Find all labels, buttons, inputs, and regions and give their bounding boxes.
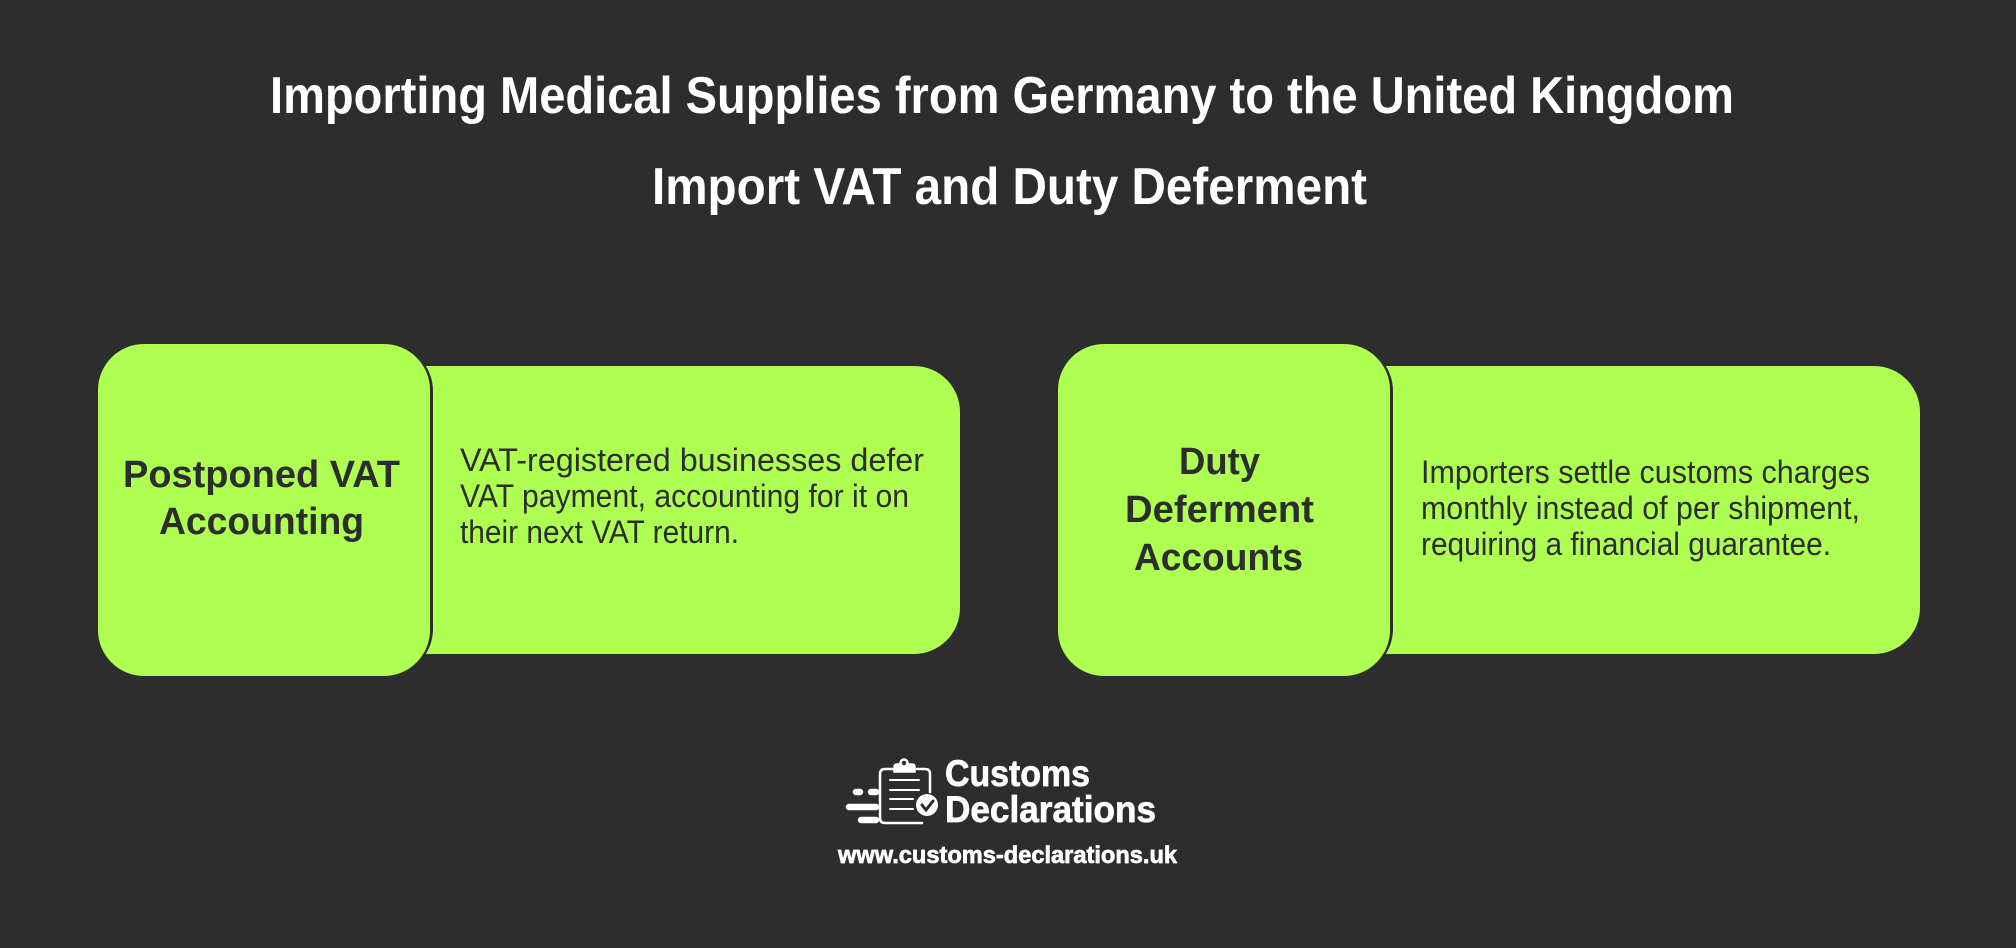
logo wordmark: Customs bbox=[945, 753, 1090, 794]
heading card: duty deferment: Deferment bbox=[1125, 489, 1314, 531]
description panel: postponed VAT: their next VAT return. bbox=[460, 514, 739, 550]
description panel: duty deferment bbox=[1290, 366, 1920, 654]
heading card: duty deferment: Accounts bbox=[1134, 537, 1303, 579]
heading card: duty deferment bbox=[1058, 344, 1393, 676]
heading card: duty deferment: Duty bbox=[1179, 441, 1260, 483]
description panel: duty deferment: requiring a financial guarantee. bbox=[1421, 526, 1831, 562]
logo bbox=[837, 753, 1178, 869]
website url: www.customs-declarations.uk bbox=[837, 842, 1178, 869]
logo wordmark: Declarations bbox=[945, 789, 1156, 830]
panel: postponed VAT accounting bbox=[98, 344, 960, 676]
title bbox=[270, 67, 1734, 216]
description panel: duty deferment: Importers settle customs charges bbox=[1421, 454, 1870, 490]
description panel: postponed VAT: VAT payment, accounting for it on bbox=[460, 478, 909, 514]
description panel: postponed VAT bbox=[330, 366, 960, 654]
heading card: postponed VAT: Postponed VAT bbox=[123, 454, 400, 496]
panel: duty deferment accounts bbox=[1058, 344, 1920, 676]
icon: clipboard with check mark bbox=[849, 760, 938, 823]
heading card: postponed VAT bbox=[98, 344, 433, 676]
title: Importing Medical Supplies from Germany to the United Kingdom bbox=[270, 67, 1734, 125]
heading card: postponed VAT: Accounting bbox=[159, 501, 364, 543]
description panel: postponed VAT: VAT-registered businesses defer bbox=[460, 442, 924, 478]
description panel: duty deferment: monthly instead of per shipment, bbox=[1421, 490, 1860, 526]
logo wordmark bbox=[945, 753, 1156, 830]
title: Import VAT and Duty Deferment bbox=[652, 158, 1367, 216]
